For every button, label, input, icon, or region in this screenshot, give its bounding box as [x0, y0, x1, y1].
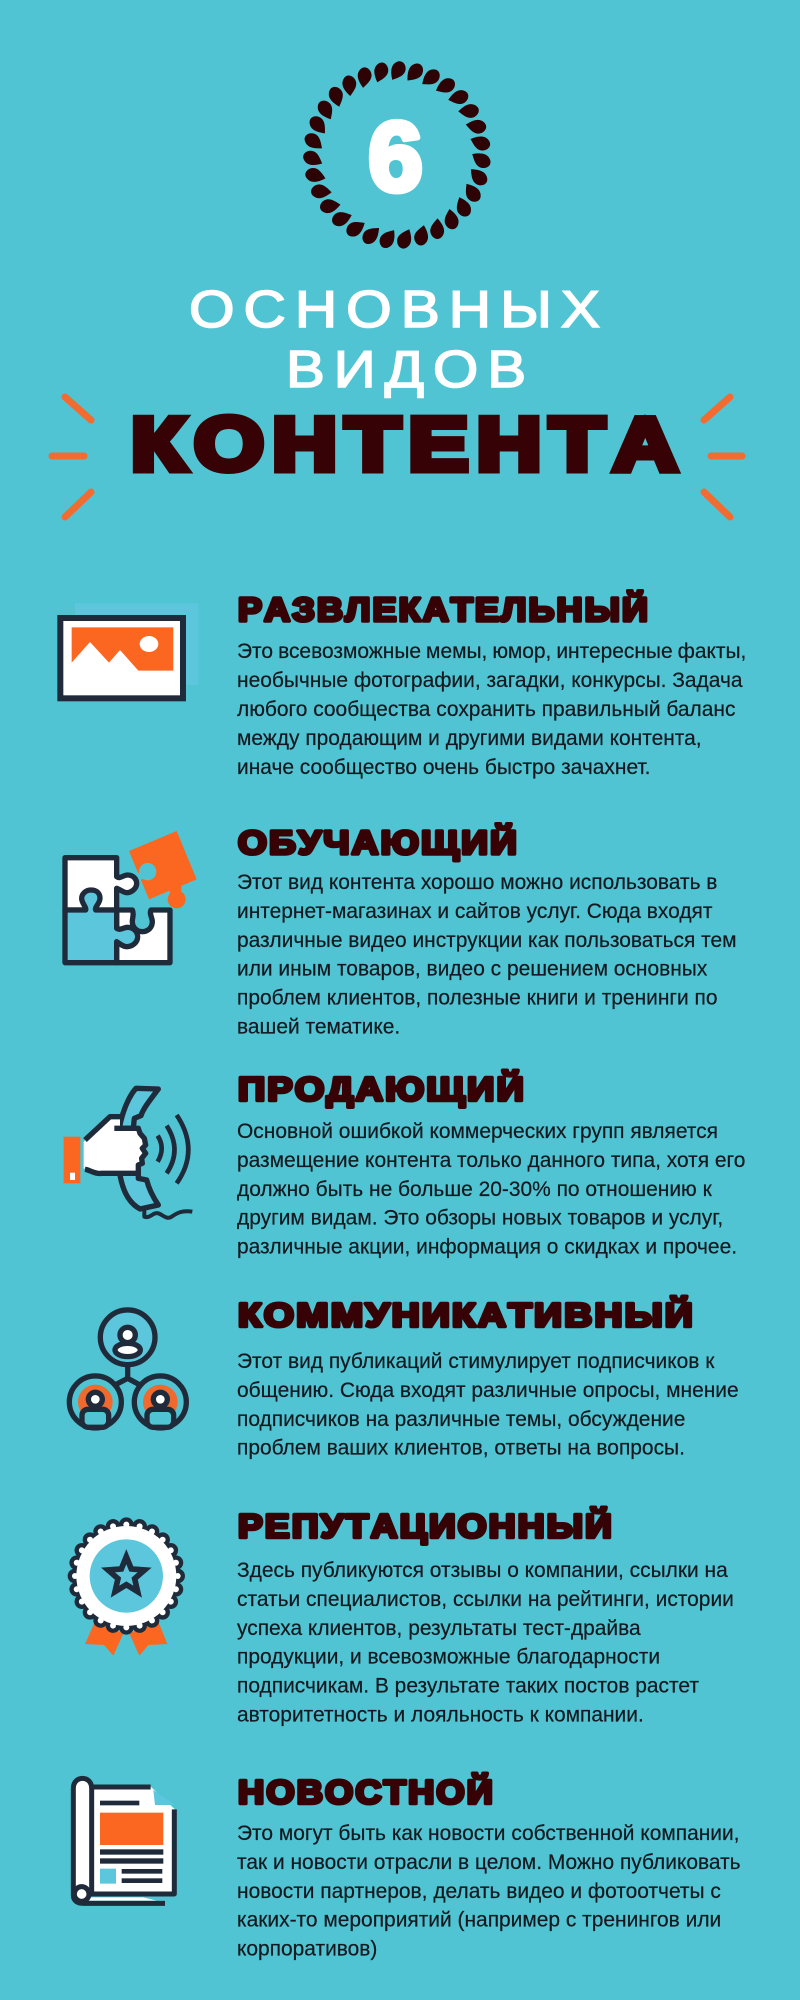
text block: общению. Сюда входят различные опросы, мнение	[237, 1379, 739, 1402]
text block: так и новости отрасли в целом. Можно публиковать	[237, 1851, 741, 1874]
text block: интернет-магазинах и сайтов услуг. Сюда входят	[237, 900, 713, 923]
text block: различные видео инструкции как пользоваться тем	[237, 929, 736, 952]
title: ВИДОВ	[286, 341, 535, 399]
text block: различные акции, информация о скидках и прочее.	[237, 1236, 737, 1259]
text block: иначе сообщество очень быстро зачахнет.	[237, 756, 650, 779]
text block: авторитетность и лояльность к компании.	[237, 1704, 644, 1726]
text block: новости партнеров, делать видео и фотоотчеты с	[237, 1880, 721, 1903]
text block: подписчикам. В результате таких постов растет	[237, 1675, 699, 1698]
text block: подписчиков на различные темы, обсуждение	[237, 1408, 685, 1431]
panel: продающий	[64, 1070, 745, 1259]
panel: репутационный	[68, 1506, 734, 1726]
icon: picture frame	[60, 603, 198, 698]
text block: или иным товаров, видео с решением основных	[237, 958, 708, 981]
heading: РАЗВЛЕКАТЕЛЬНЫЙ	[238, 590, 650, 628]
text block: каких-то мероприятий (например с тренингов или	[237, 1909, 721, 1932]
rays: left	[52, 397, 91, 517]
text block: между продающим и другими видами контента,	[237, 727, 702, 750]
text block: проблем клиентов, полезные книги и тренинги по	[237, 987, 718, 1010]
text block: успеха клиентов, результаты тест-драйва	[237, 1617, 641, 1640]
text block: необычные фотографии, загадки, конкурсы. Задача	[237, 669, 743, 692]
text block: Этот вид публикаций стимулирует подписчиков к	[237, 1350, 715, 1373]
text block: любого сообщества сохранить правильный баланс	[237, 698, 735, 721]
emblem: ring with number 6	[303, 61, 491, 249]
icon: puzzle	[65, 831, 197, 963]
heading: НОВОСТНОЙ	[238, 1772, 495, 1810]
text block: продукции, и всевозможные благодарности	[237, 1646, 660, 1669]
heading: РЕПУТАЦИОННЫЙ	[238, 1506, 614, 1544]
heading: ПРОДАЮЩИЙ	[238, 1070, 526, 1108]
text block: проблем ваших клиентов, ответы на вопросы.	[237, 1437, 685, 1460]
panel: развлекательный	[60, 590, 746, 779]
text block: вашей тематике.	[237, 1016, 400, 1038]
text block: должно быть не больше 20-30% по отношению к	[237, 1178, 713, 1201]
icon: hand with phone	[64, 1088, 192, 1218]
rays: right	[704, 397, 742, 517]
title: ОСНОВНЫХ	[189, 281, 609, 339]
text block: Это могут быть как новости собственной компании,	[237, 1822, 740, 1845]
text block: другим видам. Это обзоры новых товаров и услуг,	[237, 1207, 723, 1230]
icon: people network	[69, 1310, 186, 1428]
title: КОНТЕНТА	[131, 402, 686, 486]
emblem: ring with number 6: 6	[368, 102, 423, 212]
panel: коммуникативный	[69, 1296, 739, 1460]
text block: Основной ошибкой коммерческих групп является	[237, 1120, 718, 1143]
text block: Здесь публикуются отзывы о компании, ссылки на	[237, 1559, 728, 1582]
panel: обучающий	[65, 823, 736, 1038]
heading: ОБУЧАЮЩИЙ	[238, 823, 519, 861]
text block: статьи специалистов, ссылки на рейтинги, истории	[237, 1588, 734, 1611]
icon: award badge	[68, 1517, 185, 1656]
text block: корпоративов)	[237, 1938, 377, 1961]
icon: newspaper	[73, 1778, 175, 1903]
title	[131, 281, 686, 486]
text block: размещение контента только данного типа, хотя его	[237, 1149, 745, 1172]
text block: Это всевозможные мемы, юмор, интересные факты,	[237, 640, 746, 663]
text block: Этот вид контента хорошо можно использовать в	[237, 871, 717, 894]
panel: новостной	[73, 1772, 741, 1961]
heading: КОММУНИКАТИВНЫЙ	[238, 1296, 695, 1334]
